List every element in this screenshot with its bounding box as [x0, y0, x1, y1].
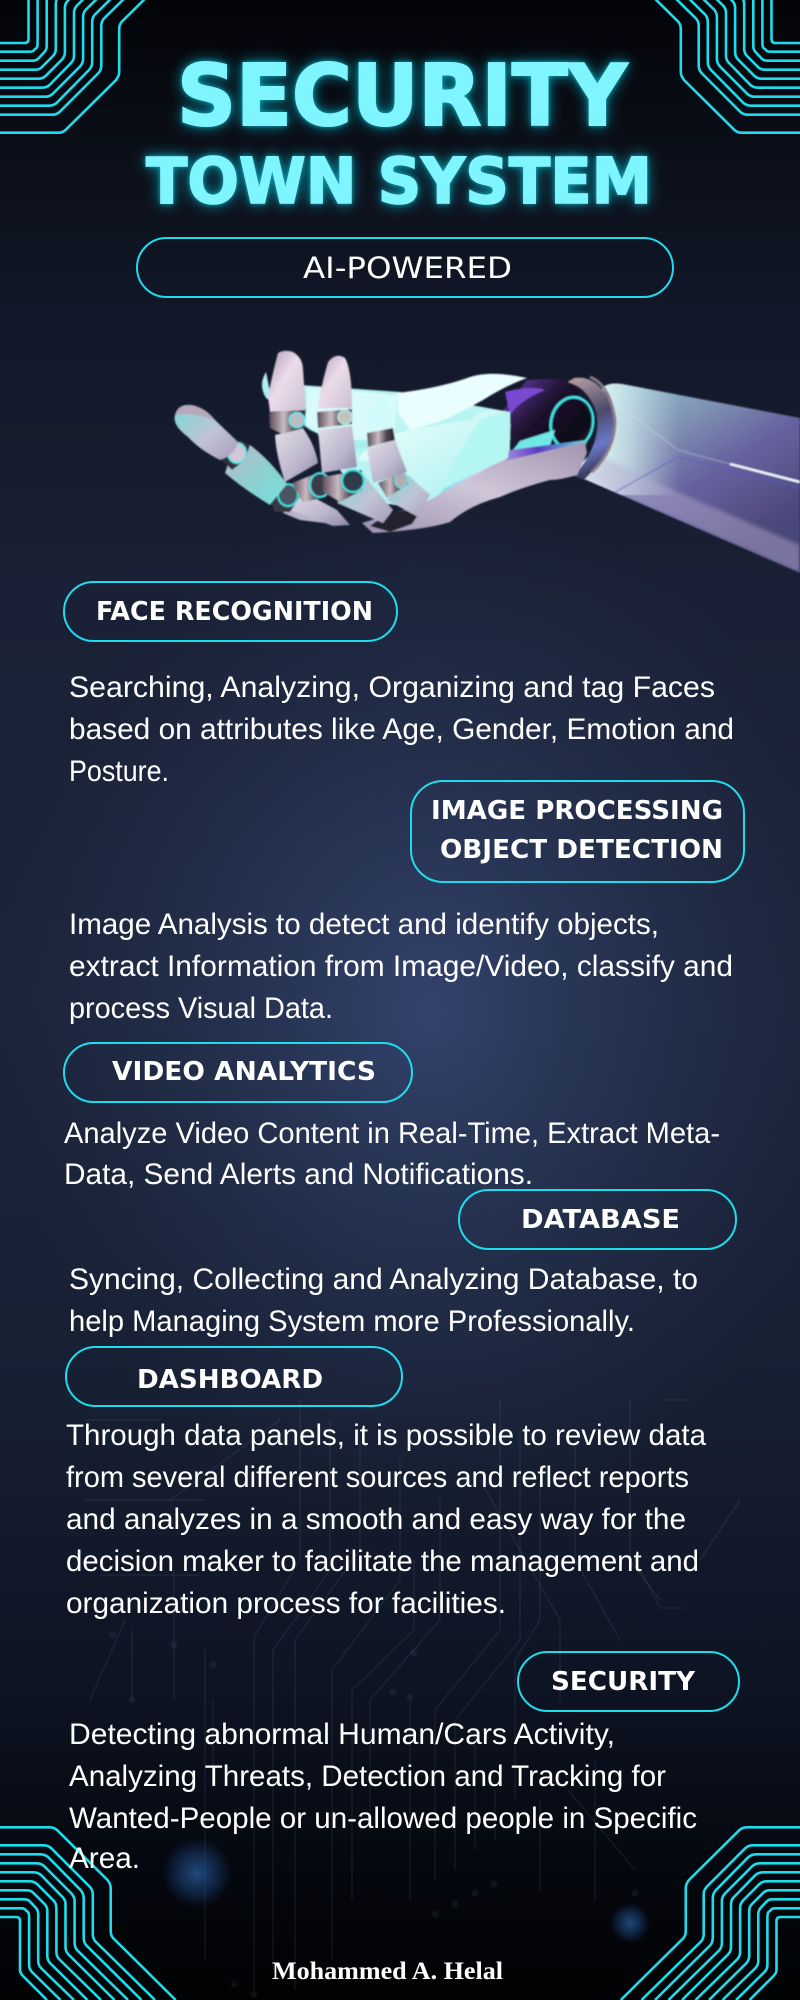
back of hand — [397, 374, 527, 430]
text: video analytics description: Data, Send Alerts and Notifications. — [64, 1158, 533, 1191]
pill: SECURITY: SECURITY — [551, 1667, 696, 1697]
forearm — [570, 375, 800, 573]
text: security description: Detecting abnormal Human/Cars Activity, — [69, 1718, 615, 1751]
text: face recognition description: Posture. — [69, 755, 169, 788]
pill: DASHBOARD: DASHBOARD — [137, 1365, 323, 1395]
pill: AI-POWERED: AI-POWERED — [303, 251, 512, 285]
text: dashboard description — [66, 1419, 706, 1620]
pill: SECURITY — [518, 1652, 739, 1711]
text: database description: help Managing System more Professionally. — [69, 1305, 635, 1338]
pill: IMAGE PROCESSING OBJECT DETECTION: IMAGE PROCESSING — [431, 796, 723, 826]
text: dashboard description: decision maker to facilitate the management and — [66, 1545, 699, 1578]
author credit: Mohammed A. Helal — [272, 1958, 503, 1985]
pill: IMAGE PROCESSING OBJECT DETECTION: OBJECT DETECTION — [440, 835, 723, 865]
text: image processing description — [69, 908, 733, 1025]
pill: VIDEO ANALYTICS — [64, 1043, 412, 1102]
text: image processing description: extract Information from Image/Video, classify and — [69, 950, 733, 983]
pill: AI-POWERED — [137, 238, 673, 297]
text: dashboard description: Through data panels, it is possible to review data — [66, 1419, 706, 1452]
text: database description — [69, 1263, 698, 1338]
finger 4: short right finger — [367, 397, 430, 517]
corner circuit lines: bottom right — [621, 1827, 800, 2000]
text: dashboard description: from several different sources and reflect reports — [66, 1461, 689, 1494]
text: video analytics description — [64, 1117, 720, 1191]
finger 1: left finger — [175, 405, 350, 526]
pill: IMAGE PROCESSING OBJECT DETECTION — [411, 781, 744, 882]
corner circuit lines: bottom left — [0, 1827, 176, 2000]
lower palm shell — [362, 442, 587, 533]
corner circuit lines: top left — [0, 0, 184, 133]
pill: FACE RECOGNITION: FACE RECOGNITION — [96, 597, 373, 627]
title line: TOWN SYSTEM: TOWN SYSTEM — [146, 145, 652, 218]
text: face recognition description: based on attributes like Age, Gender, Emotion and — [69, 713, 734, 746]
illustration: robotic hand and arm — [175, 351, 800, 573]
mint base filling the palm — [300, 385, 510, 510]
icon: right glowing blue light — [610, 1903, 650, 1943]
title line: SECURITY: SECURITY — [177, 47, 628, 146]
text: security description: Area. — [69, 1842, 140, 1875]
dark underside joints — [370, 510, 420, 532]
finger 3: tall middle finger — [317, 356, 393, 523]
pill: DATABASE: DATABASE — [521, 1205, 680, 1235]
text: face recognition description — [69, 671, 734, 788]
text: image processing description: Image Analysis to detect and identify objects, — [69, 908, 659, 941]
text: face recognition description: Searching, Analyzing, Organizing and tag Faces — [69, 671, 715, 704]
text: video analytics description: Analyze Video Content in Real-Time, Extract Meta- — [64, 1117, 720, 1150]
palm panel — [357, 410, 510, 498]
pill: DATABASE — [459, 1190, 736, 1249]
text: dashboard description: and analyzes in a smooth and easy way for the — [66, 1503, 686, 1536]
pill: VIDEO ANALYTICS: VIDEO ANALYTICS — [112, 1057, 376, 1087]
text: security description: Analyzing Threats, Detection and Tracking for — [69, 1760, 666, 1793]
wrist glass joint — [497, 377, 615, 480]
pill: DASHBOARD — [66, 1347, 402, 1406]
text: image processing description: process Visual Data. — [69, 992, 333, 1025]
corner circuit lines: top right — [616, 0, 800, 133]
knuckle bridge behind fingers — [262, 372, 410, 450]
pill: FACE RECOGNITION — [64, 582, 397, 641]
text: security description — [69, 1718, 697, 1875]
text: security description: Wanted-People or un-allowed people in Specific — [69, 1802, 697, 1835]
text: database description: Syncing, Collecting and Analyzing Database, to — [69, 1263, 698, 1296]
text: dashboard description: organization process for facilities. — [66, 1587, 506, 1620]
title — [146, 47, 652, 218]
icon: left glowing blue light — [162, 1838, 232, 1908]
iridescent palm strip — [425, 440, 587, 510]
finger 2: tall left finger — [268, 351, 330, 502]
